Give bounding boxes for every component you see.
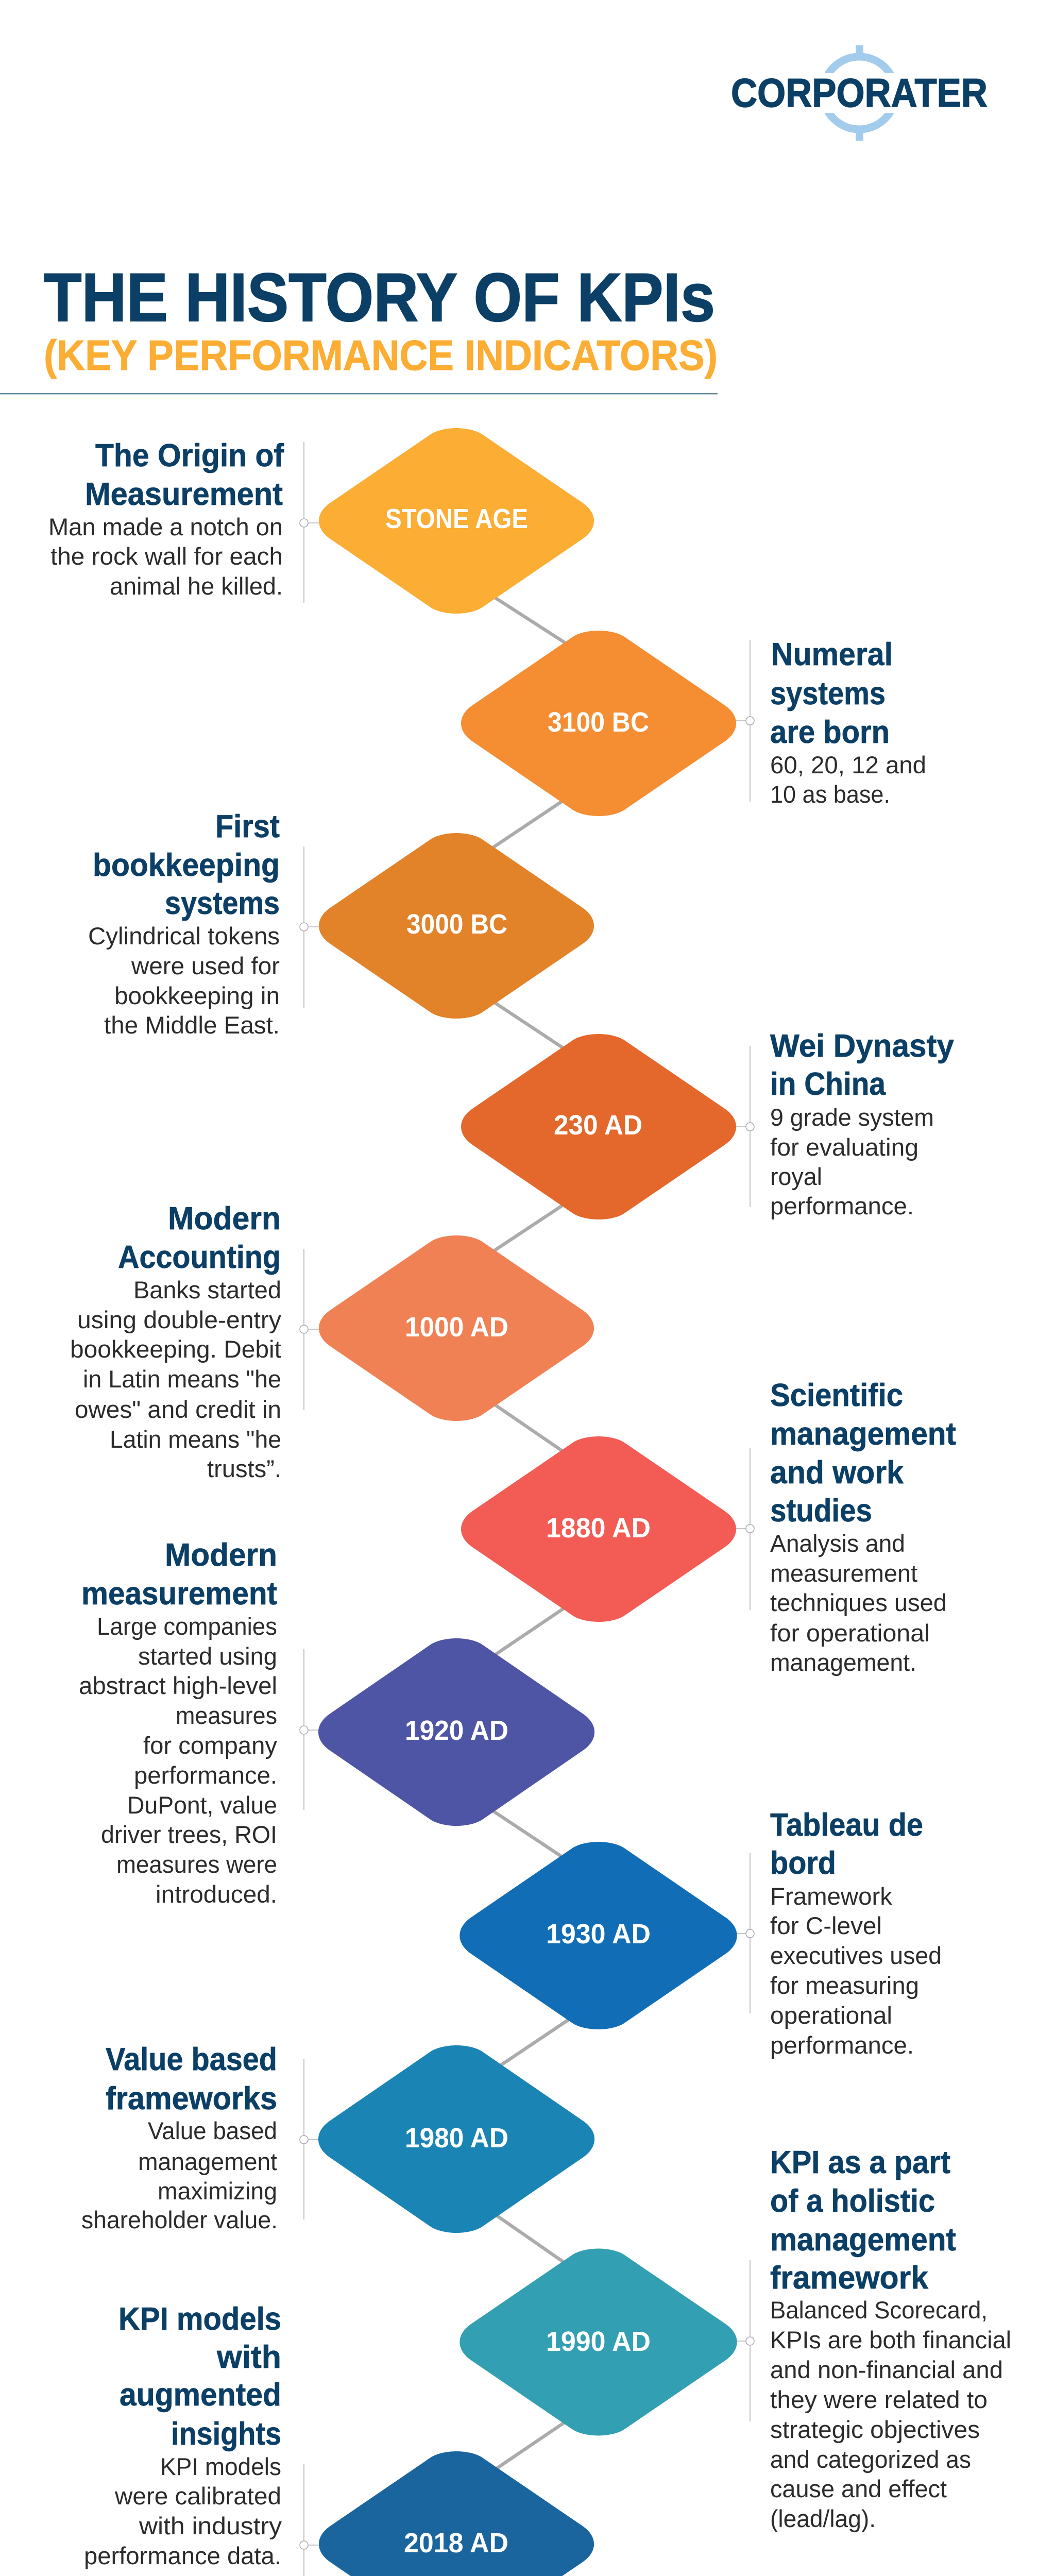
connector: 1920 AD to 1930 AD <box>487 1807 567 1860</box>
heading: Numeral systems are born <box>770 637 893 750</box>
connector: 1980 AD to 1990 AD <box>490 2211 570 2266</box>
text block: for evaluating <box>770 1133 918 1161</box>
diamond: 1880 AD <box>461 1436 736 1622</box>
text block: Framework <box>770 1883 892 1910</box>
connector: 3000 BC to 230 AD <box>488 998 568 1051</box>
diamond: 1000 AD <box>319 1235 594 1421</box>
text block: 10 as base. <box>770 781 890 808</box>
text block: management. <box>770 1649 916 1676</box>
text block: measures were <box>116 1851 277 1878</box>
panel: 2018 AD <box>84 2301 594 2576</box>
heading: Tableau de bord <box>770 1807 923 1881</box>
diamond: Stone Age <box>319 428 594 614</box>
heading: KPI models with augmented insights: KPI models <box>118 2301 281 2337</box>
text block: (lead/lag). <box>770 2505 876 2532</box>
text block: for C-level <box>770 1912 882 1939</box>
text block: bookkeeping. Debit <box>70 1335 281 1363</box>
logo wordmark: CORPORATER <box>731 70 988 115</box>
text block: for measuring <box>770 1972 919 1999</box>
connector: 1880 AD to 1920 AD <box>490 1604 570 1658</box>
text block: abstract high-level <box>79 1672 277 1699</box>
diamond: 3000 BC: 3000 BC <box>406 909 507 940</box>
text block: KPIs are both financial <box>770 2326 1011 2353</box>
text block: performance. <box>770 1192 914 1219</box>
panel: 1930 AD <box>460 1807 942 2059</box>
text block: maximizing <box>158 2177 277 2205</box>
text block <box>770 1104 934 1219</box>
heading: KPI as a part of a holistic management framework: management <box>770 2222 956 2258</box>
heading: Value based frameworks <box>106 2042 277 2116</box>
panel: 1880 AD <box>461 1378 956 1676</box>
diamond: 1980 AD: 1980 AD <box>405 2123 508 2154</box>
callout stem <box>734 640 754 802</box>
text block: in Latin means "he <box>83 1365 281 1393</box>
text block <box>81 2117 278 2233</box>
text block: owes" and credit in <box>75 1396 281 1423</box>
diamond: 1920 AD <box>318 1638 594 1826</box>
heading: Wei Dynasty in China: Wei Dynasty <box>770 1028 954 1064</box>
text block: executives used <box>770 1942 942 1969</box>
heading: Value based frameworks: Value based <box>106 2042 277 2077</box>
heading: Modern Accounting: Modern <box>168 1201 281 1236</box>
connector: 230 AD to 1000 AD <box>488 1202 568 1255</box>
connector: 1930 AD to 1980 AD <box>495 2015 575 2069</box>
text block <box>770 2296 1011 2532</box>
heading: Modern measurement: Modern <box>165 1537 277 1573</box>
panel: 1990 AD <box>460 2145 1011 2532</box>
text block: trusts”. <box>207 1455 281 1482</box>
text block: introduced. <box>156 1880 277 1908</box>
diamond: 1980 AD <box>318 2045 594 2233</box>
heading: KPI models with augmented insights: insights <box>171 2416 281 2452</box>
logo: Corporater <box>731 45 988 141</box>
subtitle: (KEY PERFORMANCE INDICATORS) <box>44 331 718 379</box>
heading: Wei Dynasty in China: in China <box>770 1066 886 1102</box>
text block: Value based <box>148 2117 277 2144</box>
text block: KPI models <box>160 2453 281 2480</box>
heading: Scientific management and work studies: and work <box>770 1455 904 1490</box>
heading: First bookkeeping systems: bookkeeping <box>93 848 280 883</box>
timeline connectors <box>476 594 582 2576</box>
text block <box>770 751 926 808</box>
heading: First bookkeeping systems: First <box>215 809 280 844</box>
diamond: 1990 AD: 1990 AD <box>546 2326 651 2357</box>
diamond: 230 AD: 230 AD <box>554 1110 642 1141</box>
connector: 3100 BC to 3000 BC <box>488 798 568 851</box>
heading: Scientific management and work studies: studies <box>770 1493 872 1529</box>
heading: KPI as a part of a holistic management framework: of a holistic <box>770 2183 935 2219</box>
heading: Modern measurement: measurement <box>81 1576 277 1612</box>
callout stem <box>734 2260 754 2421</box>
connector: 1990 AD to 2018 AD <box>491 2419 570 2472</box>
heading: Scientific management and work studies: management <box>770 1416 956 1452</box>
text block: royal <box>770 1163 822 1190</box>
heading: Modern Accounting: Accounting <box>118 1240 281 1275</box>
callout stem <box>300 1249 320 1410</box>
diamond: 3100 BC <box>461 631 736 816</box>
text block: measurement <box>770 1560 917 1587</box>
panel: 1980 AD <box>81 2042 594 2233</box>
text block <box>770 1883 942 2059</box>
text block: Balanced Scorecard, <box>770 2296 988 2324</box>
text block: performance data. <box>84 2542 281 2569</box>
callout stem <box>300 1649 319 1810</box>
connector: 1000 AD to 1880 AD <box>488 1400 565 1453</box>
text block <box>88 922 280 1039</box>
text block: performance. <box>770 2031 914 2059</box>
heading: KPI models with augmented insights: with <box>216 2340 281 2375</box>
text block: they were related to <box>770 2386 988 2413</box>
icon: crosshair ring <box>823 45 895 141</box>
text block: shareholder value. <box>81 2206 278 2233</box>
text block: cause and effect <box>770 2475 947 2502</box>
text block: for operational <box>770 1619 930 1647</box>
text block <box>70 1276 282 1482</box>
text block: and non-financial and <box>770 2356 1003 2383</box>
text block: Man made a notch on <box>48 513 283 540</box>
panel: Stone Age <box>48 428 594 614</box>
diamond: 3100 BC: 3100 BC <box>548 707 649 738</box>
panel: 1000 AD <box>70 1201 594 1482</box>
text block: the Middle East. <box>104 1011 280 1039</box>
heading: The Origin of Measurement: The Origin of <box>95 438 284 473</box>
diamond: 1920 AD: 1920 AD <box>405 1715 508 1746</box>
callout stem <box>300 2464 320 2576</box>
text block: 9 grade system <box>770 1104 934 1131</box>
heading: Numeral systems are born: systems <box>770 676 886 711</box>
heading: The Origin of Measurement <box>85 438 284 512</box>
heading: Modern Accounting <box>118 1201 281 1275</box>
heading: KPI as a part of a holistic management framework: KPI as a part <box>770 2145 950 2180</box>
text block: Banks started <box>133 1276 281 1303</box>
diamond: 1880 AD: 1880 AD <box>546 1513 651 1544</box>
panel: 1920 AD <box>79 1537 594 1908</box>
heading: Wei Dynasty in China <box>770 1028 954 1102</box>
text block: Analysis and <box>770 1530 905 1557</box>
diamond: 1990 AD <box>460 2249 737 2435</box>
text block: for company <box>143 1732 277 1759</box>
panel: 230 AD <box>461 1028 954 1219</box>
text block <box>770 1530 947 1676</box>
callout stem <box>300 442 320 603</box>
heading: Modern measurement <box>81 1537 277 1612</box>
diamond: Stone Age: STONE AGE <box>385 503 528 534</box>
heading: First bookkeeping systems <box>93 809 280 921</box>
heading: KPI models with augmented insights: augmented <box>120 2377 281 2413</box>
text block: measures <box>176 1702 277 1729</box>
text block: performance. <box>134 1761 277 1789</box>
text block: Latin means "he <box>110 1426 281 1453</box>
text block: driver trees, ROI <box>101 1821 277 1848</box>
heading: Numeral systems are born: Numeral <box>771 637 893 672</box>
text block: using double-entry <box>77 1306 282 1333</box>
heading: First bookkeeping systems: systems <box>165 886 280 921</box>
heading: KPI as a part of a holistic management framework <box>770 2145 956 2296</box>
text block: Cylindrical tokens <box>88 922 280 950</box>
callout stem <box>734 1046 754 1207</box>
text block: with industry <box>139 2512 282 2539</box>
text block: bookkeeping in <box>114 982 280 1009</box>
text block: techniques used <box>770 1589 947 1616</box>
callout stem <box>734 1853 754 2013</box>
text block: management <box>138 2148 277 2175</box>
heading: Tableau de bord: bord <box>770 1845 836 1881</box>
heading: Tableau de bord: Tableau de <box>770 1807 923 1843</box>
diamond: 2018 AD <box>319 2451 594 2576</box>
text block: DuPont, value <box>127 1791 277 1819</box>
callout stem <box>300 2059 319 2219</box>
diamond: 1930 AD <box>460 1842 737 2029</box>
text block <box>84 2453 282 2576</box>
heading: Numeral systems are born: are born <box>770 715 890 750</box>
heading: Scientific management and work studies: Scientific <box>770 1378 903 1413</box>
diamond: 1930 AD: 1930 AD <box>546 1919 651 1950</box>
text block: the rock wall for each <box>50 543 283 570</box>
text block: operational <box>770 2002 892 2029</box>
callout stem <box>300 846 320 1008</box>
text block <box>48 513 283 600</box>
diamond: 1000 AD: 1000 AD <box>405 1312 508 1343</box>
heading: KPI models with augmented insights <box>118 2301 281 2452</box>
text block: animal he killed. <box>110 572 283 600</box>
text block <box>79 1613 277 1908</box>
text block: strategic objectives <box>770 2416 980 2443</box>
connector: stone age to 3100 BC <box>489 594 572 647</box>
panel: 3000 BC <box>88 809 594 1039</box>
heading: Scientific management and work studies <box>770 1378 956 1529</box>
text block: were used for <box>131 952 280 979</box>
text block: 60, 20, 12 and <box>770 751 926 778</box>
diamond: 230 AD <box>461 1034 736 1219</box>
title: THE HISTORY OF KPIs <box>44 260 715 336</box>
text block: Large companies <box>97 1613 277 1640</box>
text block: were calibrated <box>114 2482 281 2510</box>
diamond: 3000 BC <box>319 833 594 1019</box>
callout stem <box>734 1448 754 1610</box>
panel: 3100 BC <box>461 631 926 816</box>
text block: and categorized as <box>770 2446 971 2473</box>
text block: started using <box>138 1642 277 1670</box>
heading: The Origin of Measurement: Measurement <box>85 477 283 512</box>
diamond: 2018 AD: 2018 AD <box>404 2528 508 2558</box>
heading: KPI as a part of a holistic management framework: framework <box>770 2260 929 2296</box>
heading: Value based frameworks: frameworks <box>106 2081 277 2116</box>
